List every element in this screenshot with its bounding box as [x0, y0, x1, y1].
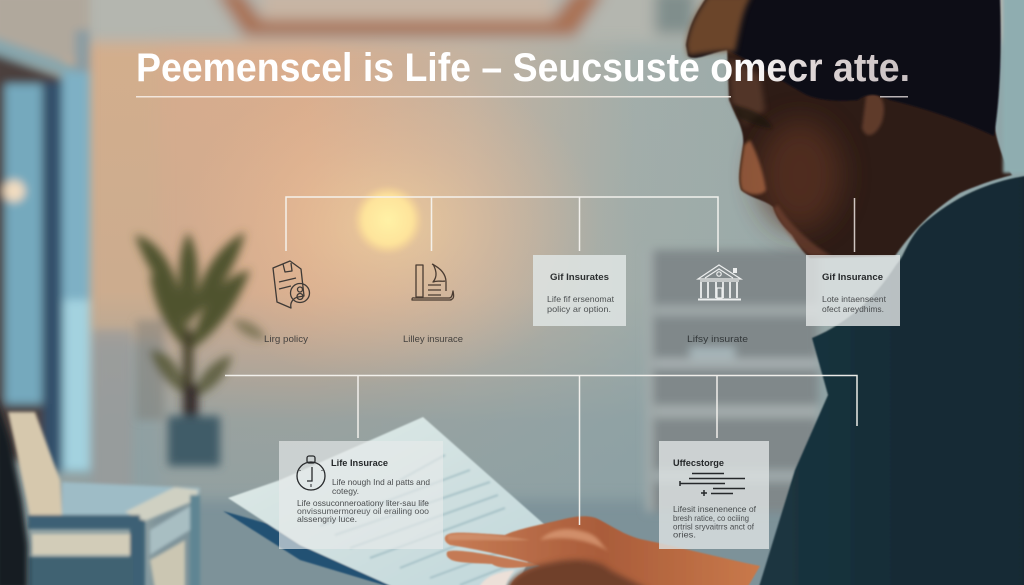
lower finger [447, 551, 540, 568]
card: Gif Insurance [806, 255, 900, 326]
card: Uffecstorge: Lifesit insenenence of [673, 504, 757, 514]
card: Life Insurace: Life Insurace [331, 458, 388, 468]
lit chin edge [773, 205, 832, 256]
neck and face [727, 30, 1012, 258]
item: Lirg policy [264, 261, 310, 345]
card: Uffecstorge [659, 441, 769, 549]
card: Gif Insurates: Gif Insurates [550, 272, 609, 282]
label: Lirg policy [264, 334, 308, 345]
ear [862, 94, 884, 135]
finger top light [448, 534, 530, 540]
card: Life Insurace: alssengriy luce. [297, 514, 357, 524]
item: Lilley insurance [403, 264, 463, 345]
label: Lilley insurace [403, 334, 463, 345]
sun glow [353, 185, 423, 255]
title: Peemenscel is Life – Seucsuste omecr atte. [136, 46, 910, 90]
card: Life Insurace: onvissumermoreuy oil erailing ooo [297, 506, 429, 516]
icon: arrows and lines [680, 474, 745, 496]
card: Life Insurace: Life ossuconneroationy liter-sau life [297, 498, 429, 508]
label: Lifsy insurate [687, 334, 748, 345]
cuff [478, 570, 515, 585]
plant [135, 232, 266, 466]
lower connector lines [225, 376, 857, 525]
card: Gif Insurates: policy ar option. [547, 304, 611, 314]
man in profile [686, 0, 1024, 585]
card: Uffecstorge: ortrisl sryvaitrrs anct of [673, 522, 755, 532]
nose highlight [740, 140, 766, 194]
card: Gif Insurates: Life fif ersenomat [547, 294, 615, 304]
icon: bank building [698, 265, 741, 300]
title rule [136, 96, 908, 98]
card: Life Insurace: Life nough Ind al patts and [332, 477, 430, 487]
card: Life Insurace: cotegy. [332, 486, 359, 496]
shadowed palm [505, 560, 650, 585]
top connector lines [286, 197, 854, 252]
card: Uffecstorge: bresh ratice, co ociiing [673, 513, 749, 523]
floor [150, 500, 800, 585]
card: Gif Insurance: ofect areydhims. [822, 304, 884, 314]
hair [686, 0, 1001, 136]
window and curtain on the left [0, 0, 132, 500]
eye and brow shadow [733, 105, 772, 128]
shirt [758, 175, 1024, 585]
document held in hand [223, 417, 545, 585]
wall sliver behind head on the right [1003, 0, 1024, 173]
foreground dark shoulder on the left edge [0, 395, 28, 585]
item: Lifsy insurate [687, 265, 748, 345]
card: Gif Insurance: Gif Insurance [822, 272, 883, 282]
card: Uffecstorge: Uffecstorge [673, 458, 724, 469]
forehead light [729, 58, 765, 125]
back of hand and wrist [445, 516, 760, 585]
icon: policy document with badge [273, 261, 310, 308]
warm cheek tone [758, 120, 842, 230]
card: Gif Insurance: Lote intaenseent [822, 294, 887, 304]
card: Life Insurace [279, 441, 443, 549]
hand [445, 516, 760, 585]
knuckle highlight [540, 529, 610, 552]
shelves in the background [646, 250, 819, 512]
armchair [8, 412, 200, 585]
card: Gif Insurates [533, 255, 626, 326]
hair front highlight [686, 0, 752, 56]
icon: book and quill [412, 264, 454, 300]
card: Uffecstorge: ories. [673, 530, 696, 540]
icon: stopwatch [297, 456, 325, 490]
